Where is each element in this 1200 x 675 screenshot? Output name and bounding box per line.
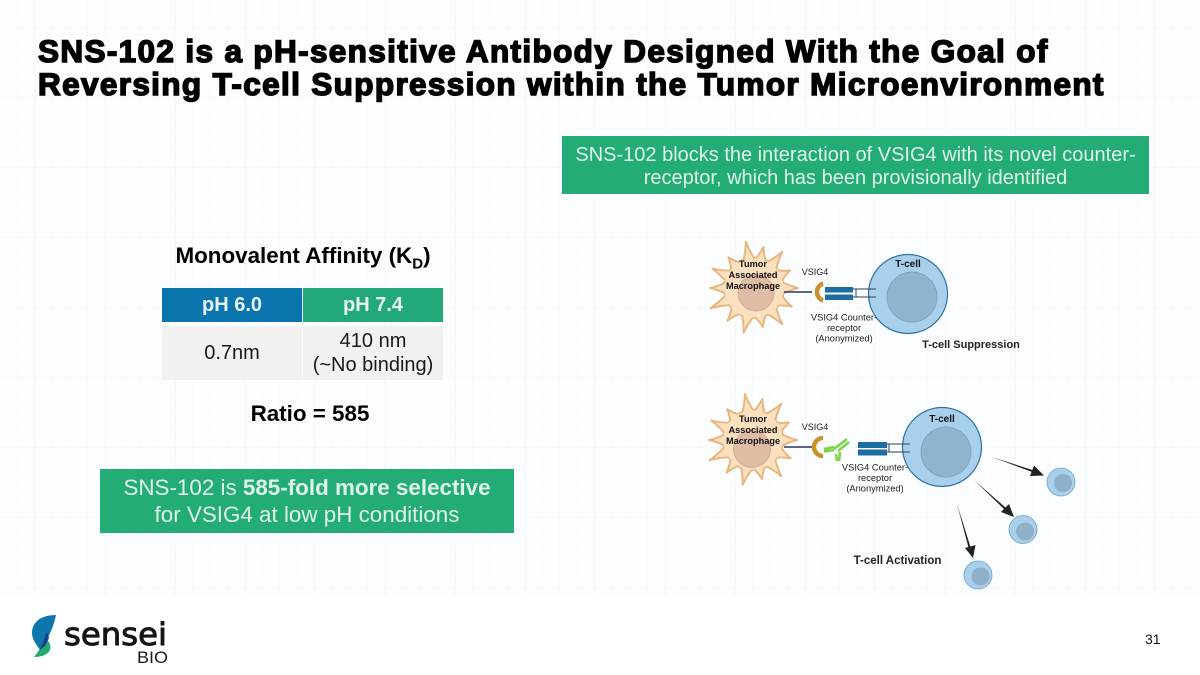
callout: selectivity bbox=[100, 469, 514, 533]
label: VSIG4 counter-receptor bbox=[842, 462, 908, 494]
label: VSIG4 counter-receptor: VSIG4 Counter- bbox=[811, 312, 877, 322]
label: VSIG4 counter-receptor: VSIG4 Counter- bbox=[842, 462, 908, 472]
icon: VSIG4 blocked by SNS-102 antibody bbox=[784, 438, 910, 461]
icon: VSIG4 bound to counter-receptor bbox=[784, 284, 876, 300]
title bbox=[38, 33, 1105, 102]
icon: tumor associated macrophage: Tumor bbox=[739, 414, 767, 424]
table value: pH 7.4: 410 nm bbox=[340, 330, 406, 352]
icon: tumor associated macrophage: Tumor bbox=[739, 259, 767, 269]
icon: activated T-cell bbox=[902, 408, 982, 486]
icon: tumor associated macrophage bbox=[707, 392, 797, 486]
table value: pH 6.0: 0.7nm bbox=[204, 342, 260, 364]
logo: Sensei Bio bbox=[32, 615, 168, 666]
panel: T-cell activation bbox=[707, 392, 1075, 589]
label: VSIG4: VSIG4 bbox=[802, 267, 828, 277]
table header: pH 6.0: pH 6.0 bbox=[202, 294, 262, 316]
callout: mechanism banner bbox=[562, 136, 1149, 194]
label: VSIG4 counter-receptor: (Anonymized) bbox=[846, 484, 904, 494]
table value: pH 6.0 bbox=[162, 326, 302, 380]
callout: mechanism banner: receptor, which has been provisionally identified bbox=[644, 167, 1067, 189]
table value: pH 7.4 bbox=[303, 326, 443, 380]
icon: daughter T-cell 3 bbox=[964, 561, 992, 589]
icon: tumor associated macrophage: Associated bbox=[728, 425, 778, 435]
label: VSIG4 counter-receptor: receptor bbox=[827, 323, 861, 333]
table header: pH 7.4 bbox=[303, 288, 443, 322]
icon: activated T-cell: T-cell bbox=[929, 414, 955, 425]
label: VSIG4 counter-receptor bbox=[811, 312, 877, 344]
panel: T-cell suppression bbox=[708, 240, 1020, 351]
page number: 31 bbox=[1145, 631, 1161, 647]
logo: Sensei Bio: sensei bbox=[64, 617, 167, 653]
table: affinity by pH bbox=[162, 288, 443, 380]
arrow: to daughter cell 2 bbox=[974, 480, 1014, 517]
title: Reversing T-cell Suppression within the Tumor Microenvironment bbox=[38, 66, 1105, 102]
icon: tumor associated macrophage: Macrophage bbox=[726, 281, 780, 291]
label: T-cell suppression: T-cell Suppression bbox=[922, 339, 1020, 351]
callout: mechanism banner: SNS-102 blocks the interaction of VSIG4 with its novel counter- bbox=[575, 144, 1136, 166]
icon: tumor associated macrophage bbox=[708, 240, 798, 334]
icon: daughter T-cell 1 bbox=[1047, 468, 1075, 496]
arrow: to daughter cell 1 bbox=[992, 457, 1044, 476]
callout: selectivity: for VSIG4 at low pH conditions bbox=[155, 502, 459, 526]
label: VSIG4 counter-receptor: receptor bbox=[858, 473, 892, 483]
icon: daughter T-cell 2 bbox=[1009, 516, 1037, 544]
icon: T-cell bbox=[868, 254, 948, 334]
icon: tumor associated macrophage: Macrophage bbox=[726, 436, 780, 446]
diagram: mechanism illustrations bbox=[708, 240, 1076, 590]
icon: T-cell: T-cell bbox=[895, 259, 921, 270]
label: VSIG4 counter-receptor: (Anonymized) bbox=[815, 334, 873, 344]
callout: selectivity: SNS-102 is 585-fold more selective bbox=[123, 475, 491, 500]
table header: pH 6.0 bbox=[162, 288, 302, 322]
label: VSIG4: VSIG4 bbox=[802, 422, 828, 432]
label: T-cell activation: T-cell Activation bbox=[854, 555, 941, 567]
table header: pH 7.4: pH 7.4 bbox=[343, 294, 403, 316]
heading: monovalent affinity: Monovalent Affinity (KD) bbox=[175, 243, 431, 272]
ratio label: Ratio = 585 bbox=[251, 401, 369, 426]
title: SNS-102 is a pH-sensitive Antibody Designed With the Goal of bbox=[38, 33, 1049, 69]
arrow: to daughter cell 3 bbox=[957, 504, 976, 558]
table value: pH 7.4: (~No binding) bbox=[313, 354, 433, 376]
icon: tumor associated macrophage: Associated bbox=[728, 270, 778, 280]
